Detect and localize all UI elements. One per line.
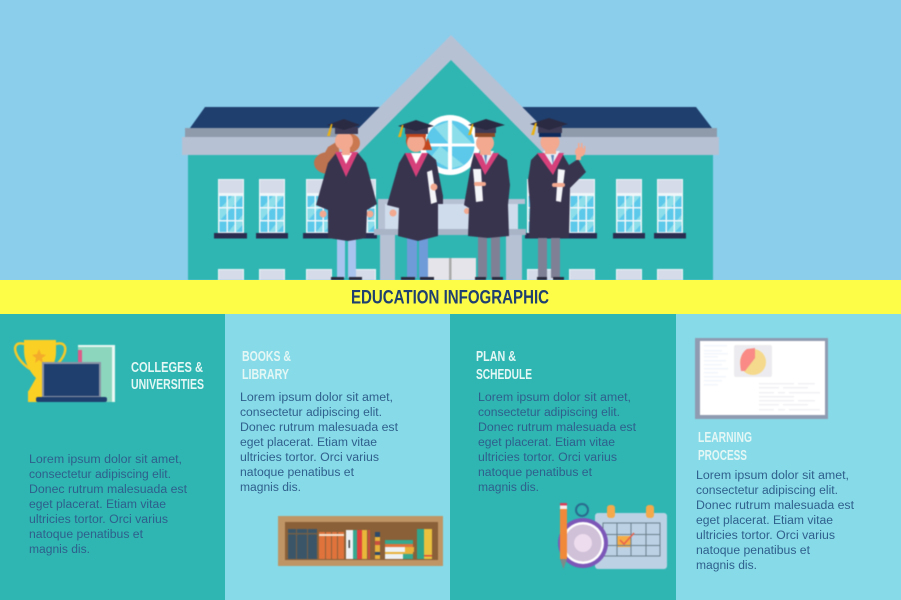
panel: colleges and universities xyxy=(0,314,225,600)
body text: natoque penatibus et xyxy=(29,529,144,541)
body text xyxy=(696,470,855,572)
heading xyxy=(242,349,291,383)
icon: bookshelf xyxy=(278,516,443,566)
body text: ultricies tortor. Orci varius xyxy=(478,452,617,464)
body text: natoque penatibus et xyxy=(240,467,355,479)
porch xyxy=(374,199,526,280)
body text: Donec rutrum malesuada est xyxy=(478,422,637,434)
roof xyxy=(190,107,712,128)
body text: Donec rutrum malesuada est xyxy=(29,484,188,496)
lower windows xyxy=(218,269,683,280)
heading: PROCESS xyxy=(698,448,747,464)
panel: learning process xyxy=(676,314,901,600)
body text: consectetur adipiscing elit. xyxy=(240,407,382,419)
heading: COLLEGES & xyxy=(131,360,203,376)
body text: Lorem ipsum dolor sit amet, xyxy=(478,392,631,404)
body text: magnis dis. xyxy=(696,560,757,572)
body text: magnis dis. xyxy=(478,482,539,494)
icon: presentation board xyxy=(695,338,828,419)
eaves xyxy=(182,128,719,155)
body text: Lorem ipsum dolor sit amet, xyxy=(240,392,393,404)
heading: UNIVERSITIES xyxy=(131,377,204,393)
graduate 3 xyxy=(464,119,510,280)
body text xyxy=(240,392,399,494)
body text: eget placerat. Etiam vitae xyxy=(240,437,377,449)
body text: ultricies tortor. Orci varius xyxy=(240,452,379,464)
heading xyxy=(131,360,204,393)
round window xyxy=(420,115,480,175)
body text: natoque penatibus et xyxy=(696,545,811,557)
heading xyxy=(698,430,752,464)
body text: eget placerat. Etiam vitae xyxy=(478,437,615,449)
title banner xyxy=(0,280,901,314)
building body xyxy=(188,155,713,280)
title: EDUCATION INFOGRAPHIC xyxy=(351,288,549,308)
body text: magnis dis. xyxy=(240,482,301,494)
body text: ultricies tortor. Orci varius xyxy=(696,530,835,542)
body text: Donec rutrum malesuada est xyxy=(696,500,855,512)
body text: Lorem ipsum dolor sit amet, xyxy=(696,470,849,482)
heading xyxy=(476,349,532,383)
panel: plan and schedule xyxy=(450,314,676,600)
body text: consectetur adipiscing elit. xyxy=(478,407,620,419)
body text: consectetur adipiscing elit. xyxy=(696,485,838,497)
body text: consectetur adipiscing elit. xyxy=(29,469,171,481)
body text: Donec rutrum malesuada est xyxy=(240,422,399,434)
panel: books and library xyxy=(225,314,450,600)
body text xyxy=(478,392,637,494)
heading: PLAN & xyxy=(476,349,516,365)
heading: LIBRARY xyxy=(242,367,289,383)
body text xyxy=(29,454,188,556)
upper windows xyxy=(214,179,686,238)
graduate 1 xyxy=(314,119,377,280)
body text: eget placerat. Etiam vitae xyxy=(696,515,833,527)
icon: calendar, stopwatch and pencil xyxy=(558,503,667,569)
heading: LEARNING xyxy=(698,430,752,446)
body text: eget placerat. Etiam vitae xyxy=(29,499,166,511)
heading: BOOKS & xyxy=(242,349,291,365)
graduate 2 xyxy=(387,120,443,280)
graduate 4 xyxy=(528,118,586,280)
illustration: school building xyxy=(182,35,719,280)
gable xyxy=(350,35,552,155)
icon: trophy, laptop and book xyxy=(15,340,115,402)
body text: natoque penatibus et xyxy=(478,467,593,479)
body text: Lorem ipsum dolor sit amet, xyxy=(29,454,182,466)
heading: SCHEDULE xyxy=(476,367,532,383)
body text: magnis dis. xyxy=(29,544,90,556)
body text: ultricies tortor. Orci varius xyxy=(29,514,168,526)
sky background xyxy=(0,0,901,280)
